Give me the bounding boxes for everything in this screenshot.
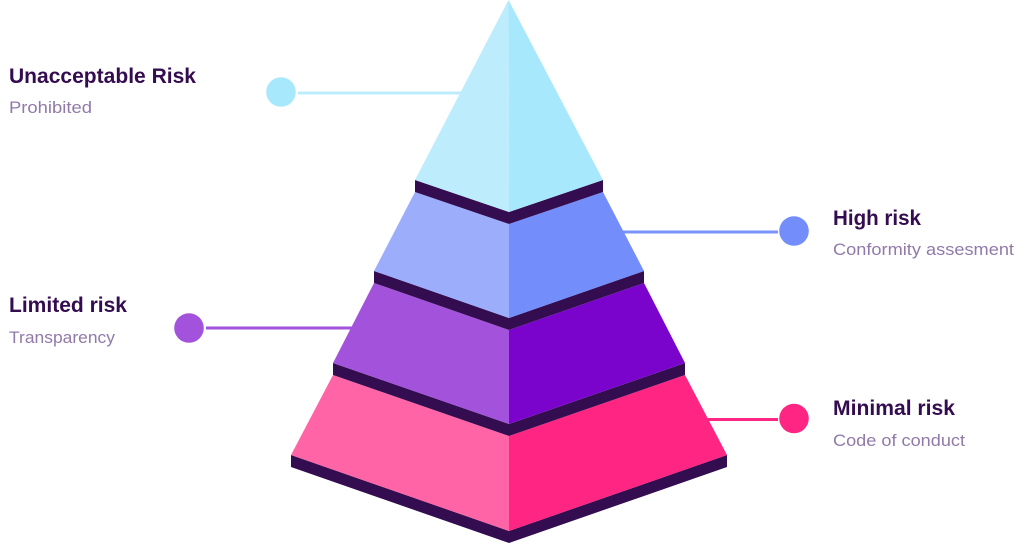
label: high risk: High risk	[833, 207, 921, 230]
tier: minimal risk	[291, 375, 727, 543]
connector: minimal risk	[704, 404, 809, 433]
connector: unacceptable risk	[266, 77, 468, 107]
tier: limited risk	[333, 283, 685, 436]
label: minimal risk: Minimal risk	[833, 397, 955, 420]
label: high risk	[833, 207, 1014, 259]
label: limited risk: Transparency	[9, 328, 116, 347]
label: minimal risk	[833, 397, 965, 450]
tier: high risk	[374, 192, 644, 330]
label: limited risk	[9, 294, 127, 347]
label: unacceptable risk: Unacceptable Risk	[9, 65, 196, 88]
pyramid	[291, 0, 727, 543]
connector: limited risk	[174, 313, 356, 343]
label: unacceptable risk	[9, 65, 196, 117]
tier: unacceptable risk	[415, 0, 603, 224]
label: unacceptable risk: Prohibited	[9, 98, 92, 117]
label: high risk: Conformity assesment	[833, 240, 1014, 259]
label: minimal risk: Code of conduct	[833, 431, 965, 450]
connector: high risk	[618, 216, 809, 246]
label: limited risk: Limited risk	[9, 294, 127, 317]
